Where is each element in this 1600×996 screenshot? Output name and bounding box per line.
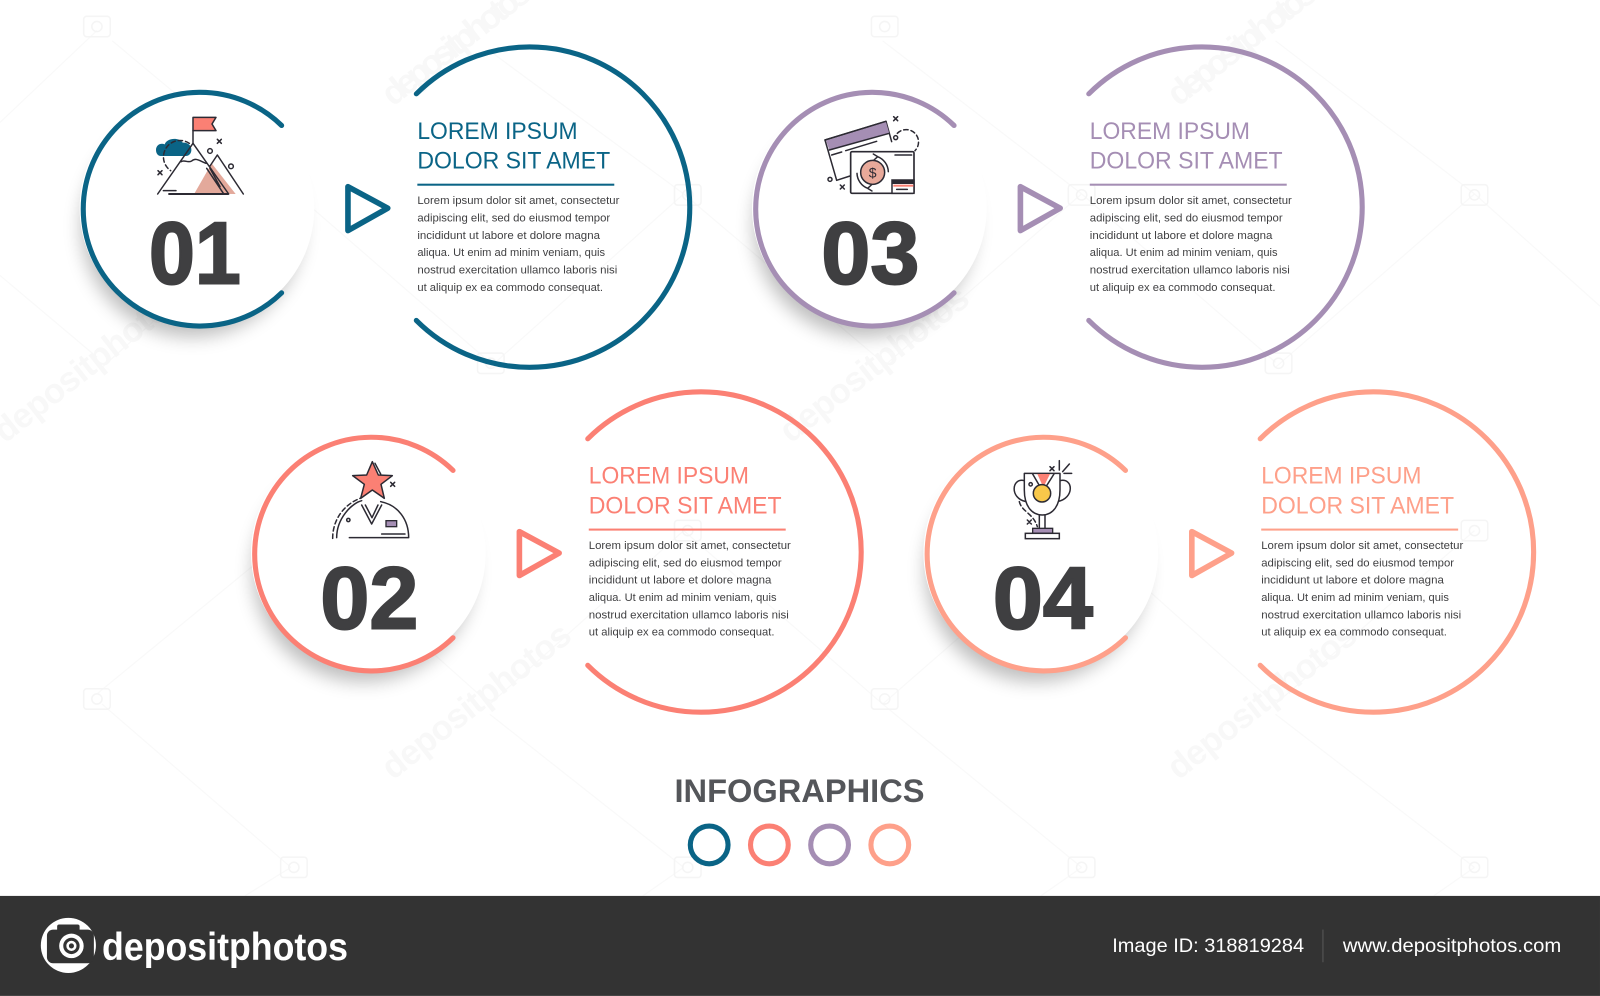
divider xyxy=(417,184,614,186)
body text: adipiscing elit, sed do eiusmod tempor xyxy=(589,557,782,569)
body text xyxy=(1261,540,1464,639)
body text: ut aliquip ex ea commodo consequat. xyxy=(589,627,774,639)
number circle 02 xyxy=(251,436,486,682)
text circle xyxy=(1089,47,1362,367)
number circle 03 xyxy=(752,91,987,337)
body text: nostrud exercitation ullamco laboris nisi xyxy=(589,609,789,621)
watermark pattern: depositphotos xyxy=(1160,616,1364,787)
body text: aliqua. Ut enim ad minim veniam, quis xyxy=(417,247,605,259)
panel: step 02 xyxy=(251,392,861,712)
number 03: 03 xyxy=(821,205,919,303)
watermark pattern: depositphotos xyxy=(374,616,579,787)
text circle xyxy=(588,392,861,712)
icon: camera logo xyxy=(41,918,96,973)
icon: cards and money: $ xyxy=(869,164,877,180)
body text: Lorem ipsum dolor sit amet, consectetur xyxy=(1261,540,1464,552)
number 04: 04 xyxy=(993,550,1093,648)
title: INFOGRAPHICS xyxy=(674,772,924,809)
panel: step 04 xyxy=(923,392,1534,712)
body text: nostrud exercitation ullamco laboris nisi xyxy=(1261,609,1461,621)
number circle 04 xyxy=(923,436,1158,682)
body text: aliqua. Ut enim ad minim veniam, quis xyxy=(1090,247,1278,259)
body text: ut aliquip ex ea commodo consequat. xyxy=(1261,627,1447,639)
body text: ut aliquip ex ea commodo consequat. xyxy=(417,282,603,294)
icon: mountain with flag xyxy=(156,117,243,194)
heading: LOREM IPSUM xyxy=(589,463,749,490)
website: www.depositphotos.com xyxy=(1342,935,1561,957)
text circle xyxy=(1260,392,1534,712)
heading: DOLOR SIT AMET xyxy=(417,147,610,174)
number circle 01 xyxy=(80,91,314,337)
arrow xyxy=(1192,532,1232,576)
body text: ut aliquip ex ea commodo consequat. xyxy=(1090,282,1276,294)
icon: cards and money xyxy=(825,117,919,193)
heading xyxy=(1090,118,1283,174)
body text: nostrud exercitation ullamco laboris nisi xyxy=(417,264,617,276)
heading: LOREM IPSUM xyxy=(417,118,578,145)
heading: LOREM IPSUM xyxy=(1090,118,1250,145)
heading xyxy=(417,118,610,174)
panel: step 03 xyxy=(752,47,1362,367)
footer bar xyxy=(0,896,1600,996)
footer divider xyxy=(1322,930,1323,962)
icon: trophy with medal xyxy=(1014,461,1072,539)
body text: adipiscing elit, sed do eiusmod tempor xyxy=(1261,557,1454,569)
heading: DOLOR SIT AMET xyxy=(1090,147,1283,174)
watermark pattern: depositphotos xyxy=(772,279,977,450)
heading: DOLOR SIT AMET xyxy=(589,492,782,519)
text circle xyxy=(416,47,690,367)
body text: adipiscing elit, sed do eiusmod tempor xyxy=(417,212,610,224)
body text: incididunt ut labore et dolore magna xyxy=(589,575,772,587)
arrow xyxy=(519,532,559,576)
body text: incididunt ut labore et dolore magna xyxy=(1261,575,1445,587)
heading xyxy=(589,463,782,519)
body text: aliqua. Ut enim ad minim veniam, quis xyxy=(589,592,777,604)
divider xyxy=(1261,529,1458,531)
divider xyxy=(589,529,786,531)
number 01: 01 xyxy=(149,205,241,303)
body text: Lorem ipsum dolor sit amet, consectetur xyxy=(1090,195,1292,207)
body text: incididunt ut labore et dolore magna xyxy=(1090,230,1273,242)
body text xyxy=(589,540,791,639)
icon: star person xyxy=(333,462,409,538)
body text xyxy=(417,195,620,294)
legend rings xyxy=(690,826,909,864)
number 02: 02 xyxy=(320,550,418,648)
logo wordmark: depositphotos xyxy=(102,926,348,969)
arrow xyxy=(1020,187,1060,231)
body text: incididunt ut labore et dolore magna xyxy=(417,230,601,242)
panel: step 01 xyxy=(80,47,690,367)
body text: adipiscing elit, sed do eiusmod tempor xyxy=(1090,212,1283,224)
divider xyxy=(1090,184,1287,186)
body text: aliqua. Ut enim ad minim veniam, quis xyxy=(1261,592,1449,604)
heading: LOREM IPSUM xyxy=(1261,463,1421,490)
image id: Image ID: 318819284 xyxy=(1112,935,1304,957)
arrow xyxy=(348,187,388,231)
body text: Lorem ipsum dolor sit amet, consectetur xyxy=(589,540,791,552)
body text: nostrud exercitation ullamco laboris nisi xyxy=(1090,264,1290,276)
heading xyxy=(1261,463,1454,519)
heading: DOLOR SIT AMET xyxy=(1261,492,1454,519)
body text xyxy=(1090,195,1292,294)
body text: Lorem ipsum dolor sit amet, consectetur xyxy=(417,195,620,207)
